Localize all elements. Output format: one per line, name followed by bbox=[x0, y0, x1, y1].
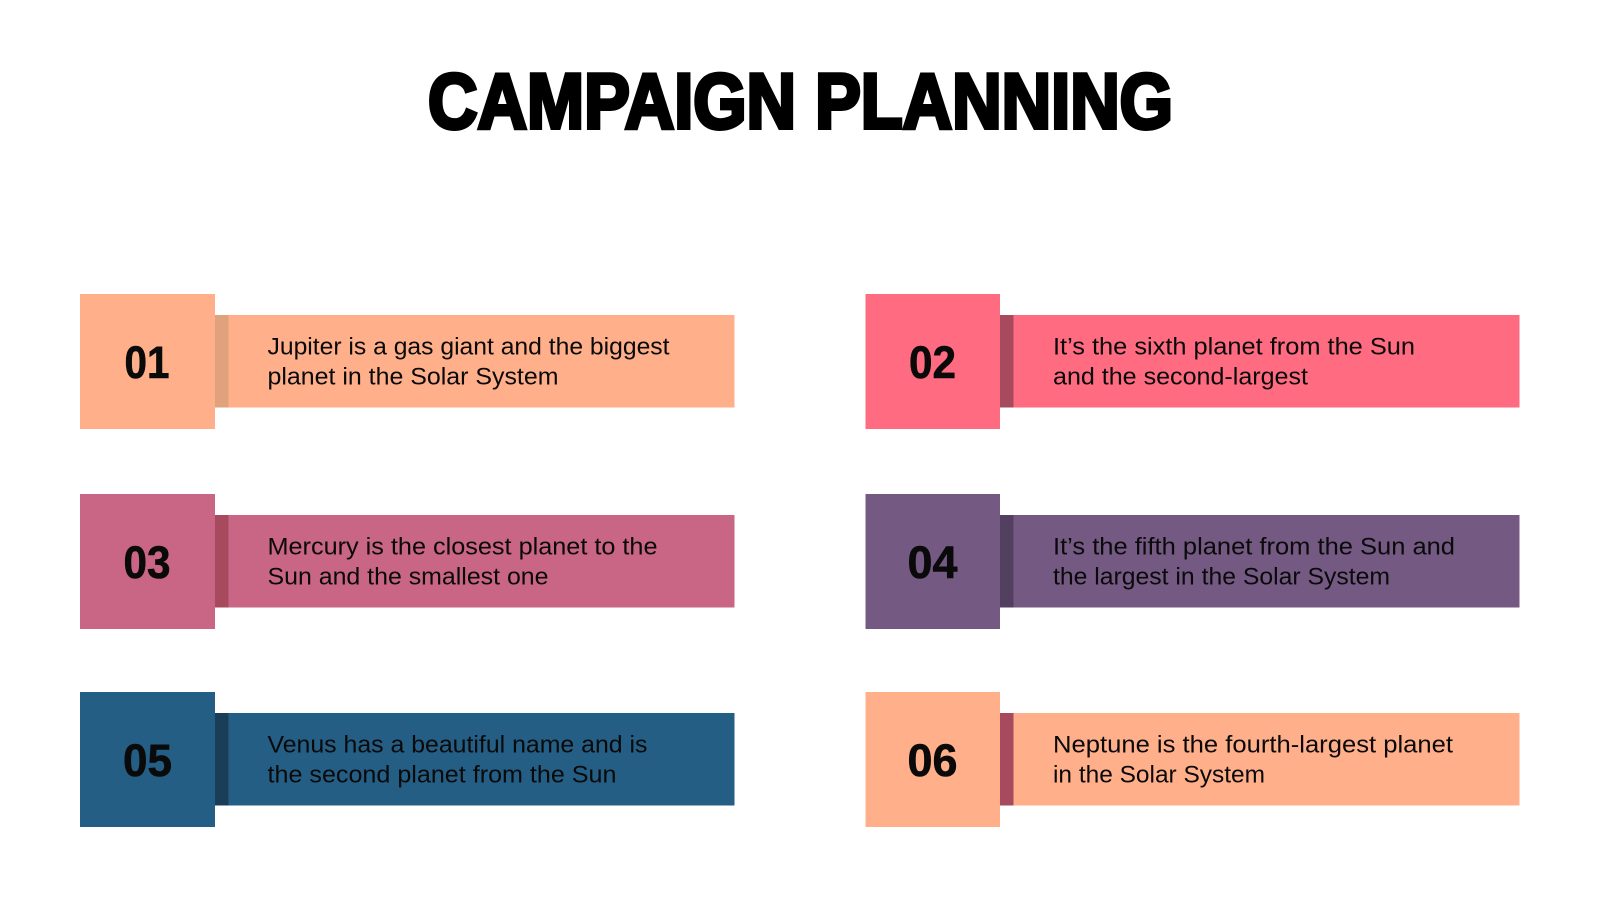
description: item 01 bbox=[268, 334, 670, 390]
description: item 04: the largest in the Solar System bbox=[1053, 564, 1390, 590]
bar: item 06 bbox=[1000, 713, 1520, 806]
panel: item 04 bbox=[866, 494, 1520, 629]
number box: item 04 bbox=[866, 494, 1000, 629]
bar: item 01 bbox=[215, 315, 734, 408]
number: 01: 01 bbox=[124, 337, 170, 388]
description: item 03: Mercury is the closest planet to the bbox=[268, 534, 658, 560]
number box: item 03 bbox=[80, 494, 215, 629]
bar: item 02 bbox=[1000, 315, 1520, 408]
accent strip: item 06 bbox=[1000, 713, 1014, 806]
bar: item 05 bbox=[215, 713, 734, 806]
panel: item 02 bbox=[866, 294, 1520, 429]
bar: item 04 bbox=[1000, 515, 1520, 608]
description: item 05 bbox=[268, 732, 648, 788]
number box: item 05 bbox=[80, 692, 215, 827]
accent strip: item 02 bbox=[1000, 315, 1014, 408]
description: item 01: Jupiter is a gas giant and the biggest bbox=[268, 334, 670, 360]
number: 03: 03 bbox=[124, 537, 170, 588]
number box: item 01 bbox=[80, 294, 215, 429]
accent strip: item 04 bbox=[1000, 515, 1014, 608]
title: CAMPAIGN PLANNING bbox=[428, 57, 1173, 145]
number box: item 02 bbox=[866, 294, 1000, 429]
panel: item 01 bbox=[80, 294, 734, 429]
description: item 02: It’s the sixth planet from the Sun bbox=[1053, 334, 1415, 360]
bar: item 03 bbox=[215, 515, 734, 608]
description: item 03 bbox=[268, 534, 658, 590]
panel: item 03 bbox=[80, 494, 734, 629]
accent strip: item 01 bbox=[215, 315, 228, 408]
accent strip: item 05 bbox=[215, 713, 228, 806]
number: 04: 04 bbox=[908, 537, 958, 588]
panel: item 06 bbox=[866, 692, 1520, 827]
description: item 01: planet in the Solar System bbox=[268, 364, 558, 390]
description: item 02 bbox=[1053, 334, 1415, 390]
number: 02: 02 bbox=[909, 337, 956, 388]
number: 06: 06 bbox=[908, 735, 958, 786]
description: item 06: in the Solar System bbox=[1053, 762, 1265, 788]
number box: item 06 bbox=[866, 692, 1000, 827]
description: item 06: Neptune is the fourth-largest planet bbox=[1053, 732, 1453, 758]
accent strip: item 03 bbox=[215, 515, 228, 608]
description: item 05: the second planet from the Sun bbox=[268, 762, 616, 788]
description: item 06 bbox=[1053, 732, 1453, 788]
panel: item 05 bbox=[80, 692, 734, 827]
description: item 04: It’s the fifth planet from the Sun and bbox=[1053, 534, 1455, 560]
description: item 03: Sun and the smallest one bbox=[268, 564, 548, 590]
description: item 02: and the second-largest bbox=[1053, 364, 1308, 390]
number: 05: 05 bbox=[123, 735, 172, 786]
description: item 05: Venus has a beautiful name and is bbox=[268, 732, 648, 758]
description: item 04 bbox=[1053, 534, 1455, 590]
